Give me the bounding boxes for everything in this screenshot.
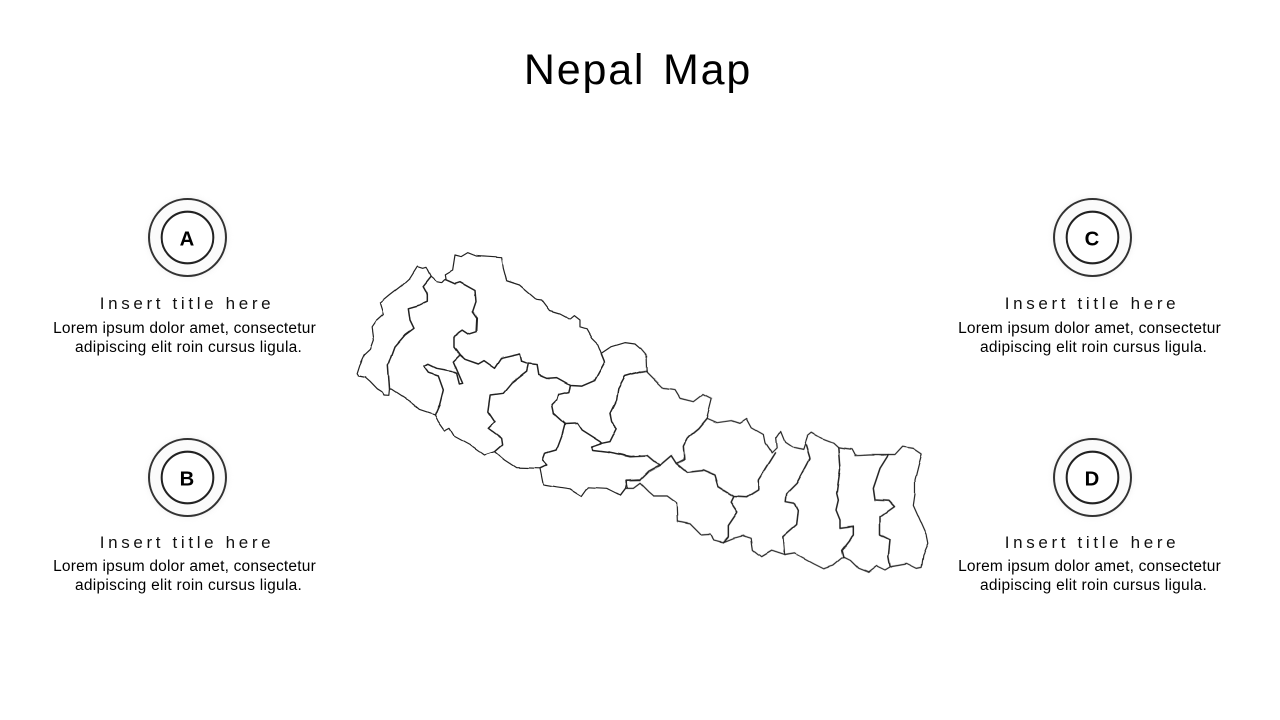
icon: badge D: D [1085, 469, 1099, 491]
text block: C: Lorem ipsum dolor amet, consectetur [958, 320, 1221, 336]
icon: badge C [1053, 198, 1132, 277]
text block: B: adipiscing elit roin cursus ligula. [75, 576, 302, 594]
icon: badge C: C [1085, 229, 1100, 251]
text block: D: adipiscing elit roin cursus ligula. [980, 576, 1207, 594]
text block: D: Lorem ipsum dolor amet, consectetur [958, 558, 1221, 574]
icon: badge D [1053, 438, 1132, 517]
text block: B: Lorem ipsum dolor amet, consectetur [53, 558, 316, 574]
panel: B [53, 438, 316, 594]
icon: badge B [148, 438, 227, 517]
icon: badge B: B [180, 469, 194, 491]
title: Nepal Map [524, 46, 752, 94]
heading: B: Insert title here [100, 533, 274, 552]
panel: C [958, 198, 1221, 356]
text block: A [53, 320, 316, 356]
text block: B [53, 558, 316, 594]
text block: C [958, 320, 1221, 356]
icon: badge A [148, 198, 227, 277]
text block: D [958, 558, 1221, 594]
heading: A: Insert title here [100, 294, 274, 313]
panel: A [53, 198, 316, 356]
text block: C: adipiscing elit roin cursus ligula. [980, 338, 1207, 356]
panel: D [958, 438, 1221, 594]
text block: A: Lorem ipsum dolor amet, consectetur [53, 320, 316, 336]
text block: A: adipiscing elit roin cursus ligula. [75, 338, 302, 356]
heading: D: Insert title here [1005, 533, 1179, 552]
heading: C: Insert title here [1005, 294, 1179, 313]
icon: badge A: A [180, 229, 195, 251]
